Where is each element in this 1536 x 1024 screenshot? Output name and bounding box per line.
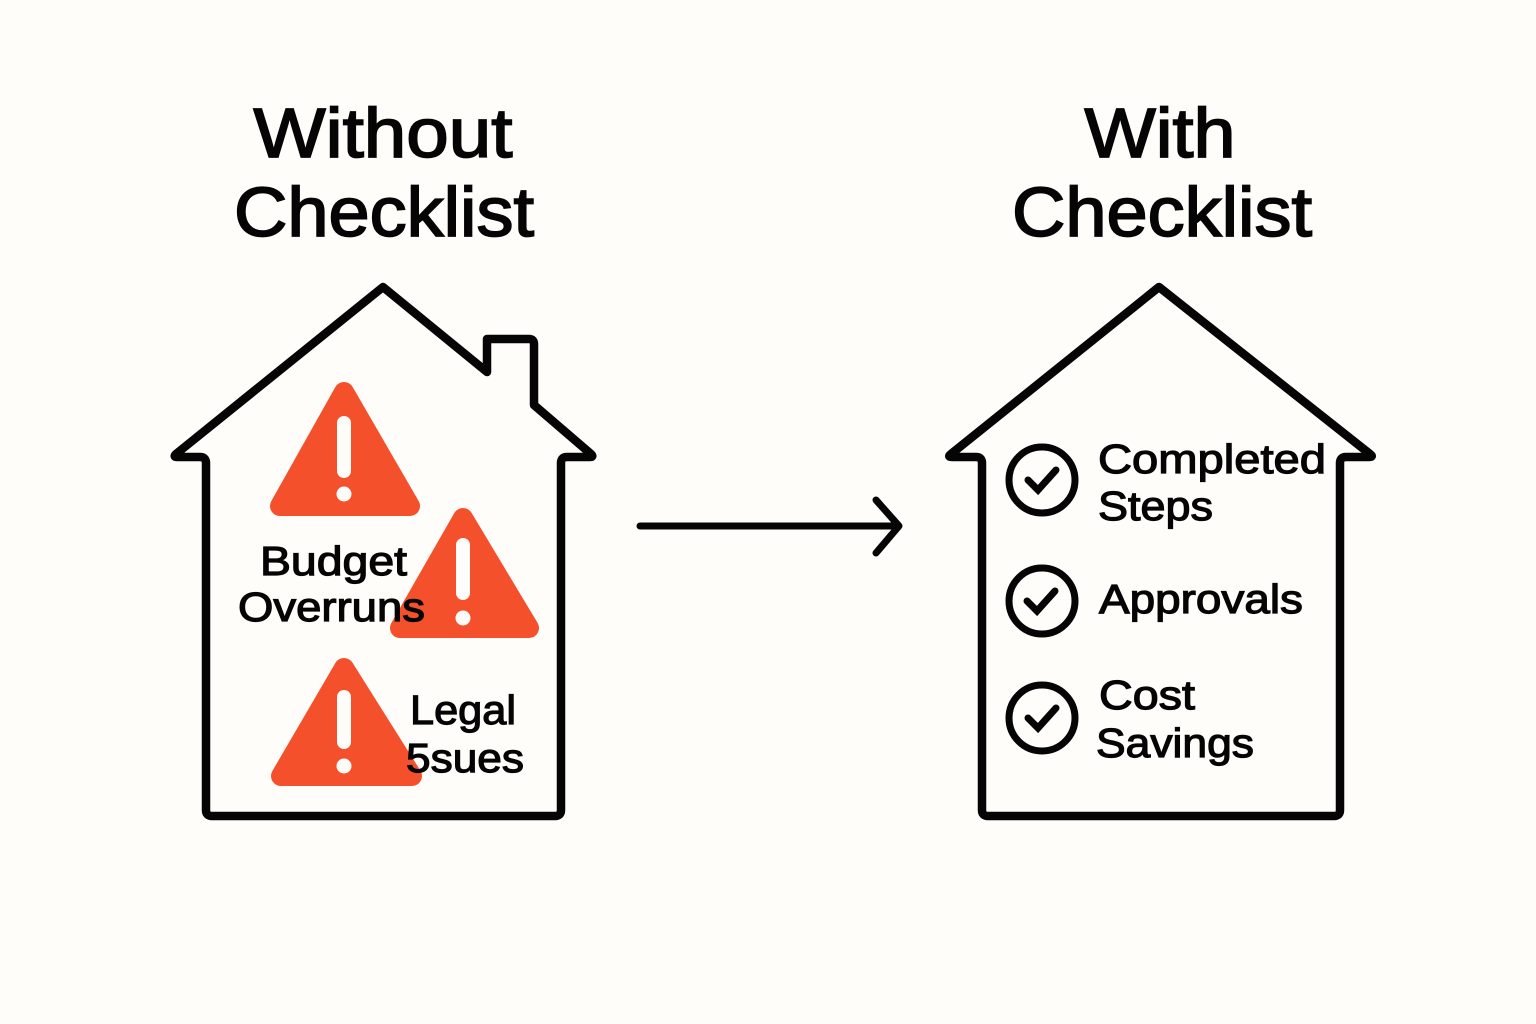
label: legal issues: Legal bbox=[410, 687, 516, 733]
warning triangle 3 bbox=[281, 668, 412, 776]
heading: without checklist bbox=[234, 94, 534, 251]
arrow bbox=[640, 500, 899, 553]
heading: with checklist bbox=[1012, 94, 1312, 251]
label: approvals: Approvals bbox=[1099, 576, 1303, 622]
heading: with checklist: Checklist bbox=[1012, 173, 1312, 251]
house outline: without checklist bbox=[175, 287, 592, 816]
check icon: cost savings bbox=[1009, 685, 1075, 751]
check icon: approvals bbox=[1009, 568, 1075, 634]
label: legal issues bbox=[406, 687, 524, 781]
heading: with checklist: With bbox=[1084, 94, 1236, 172]
label: cost savings: Cost bbox=[1099, 672, 1196, 718]
warning triangle 1 bbox=[280, 392, 410, 506]
label: budget overruns: Budget bbox=[260, 538, 408, 584]
label: cost savings bbox=[1096, 672, 1254, 766]
heading: without checklist: Checklist bbox=[234, 173, 534, 251]
check icon: completed steps bbox=[1009, 447, 1075, 513]
label: budget overruns bbox=[238, 538, 425, 630]
house outline: with checklist bbox=[949, 287, 1372, 816]
warning triangle 2 bbox=[400, 518, 529, 628]
label: completed steps: Completed bbox=[1098, 436, 1326, 482]
heading: without checklist: Without bbox=[254, 94, 512, 172]
label: legal issues: 5sues bbox=[406, 735, 524, 781]
label: budget overruns: Overruns bbox=[238, 584, 425, 630]
label: completed steps: Steps bbox=[1098, 483, 1213, 529]
label: cost savings: Savings bbox=[1096, 720, 1254, 766]
label: completed steps bbox=[1098, 436, 1326, 529]
